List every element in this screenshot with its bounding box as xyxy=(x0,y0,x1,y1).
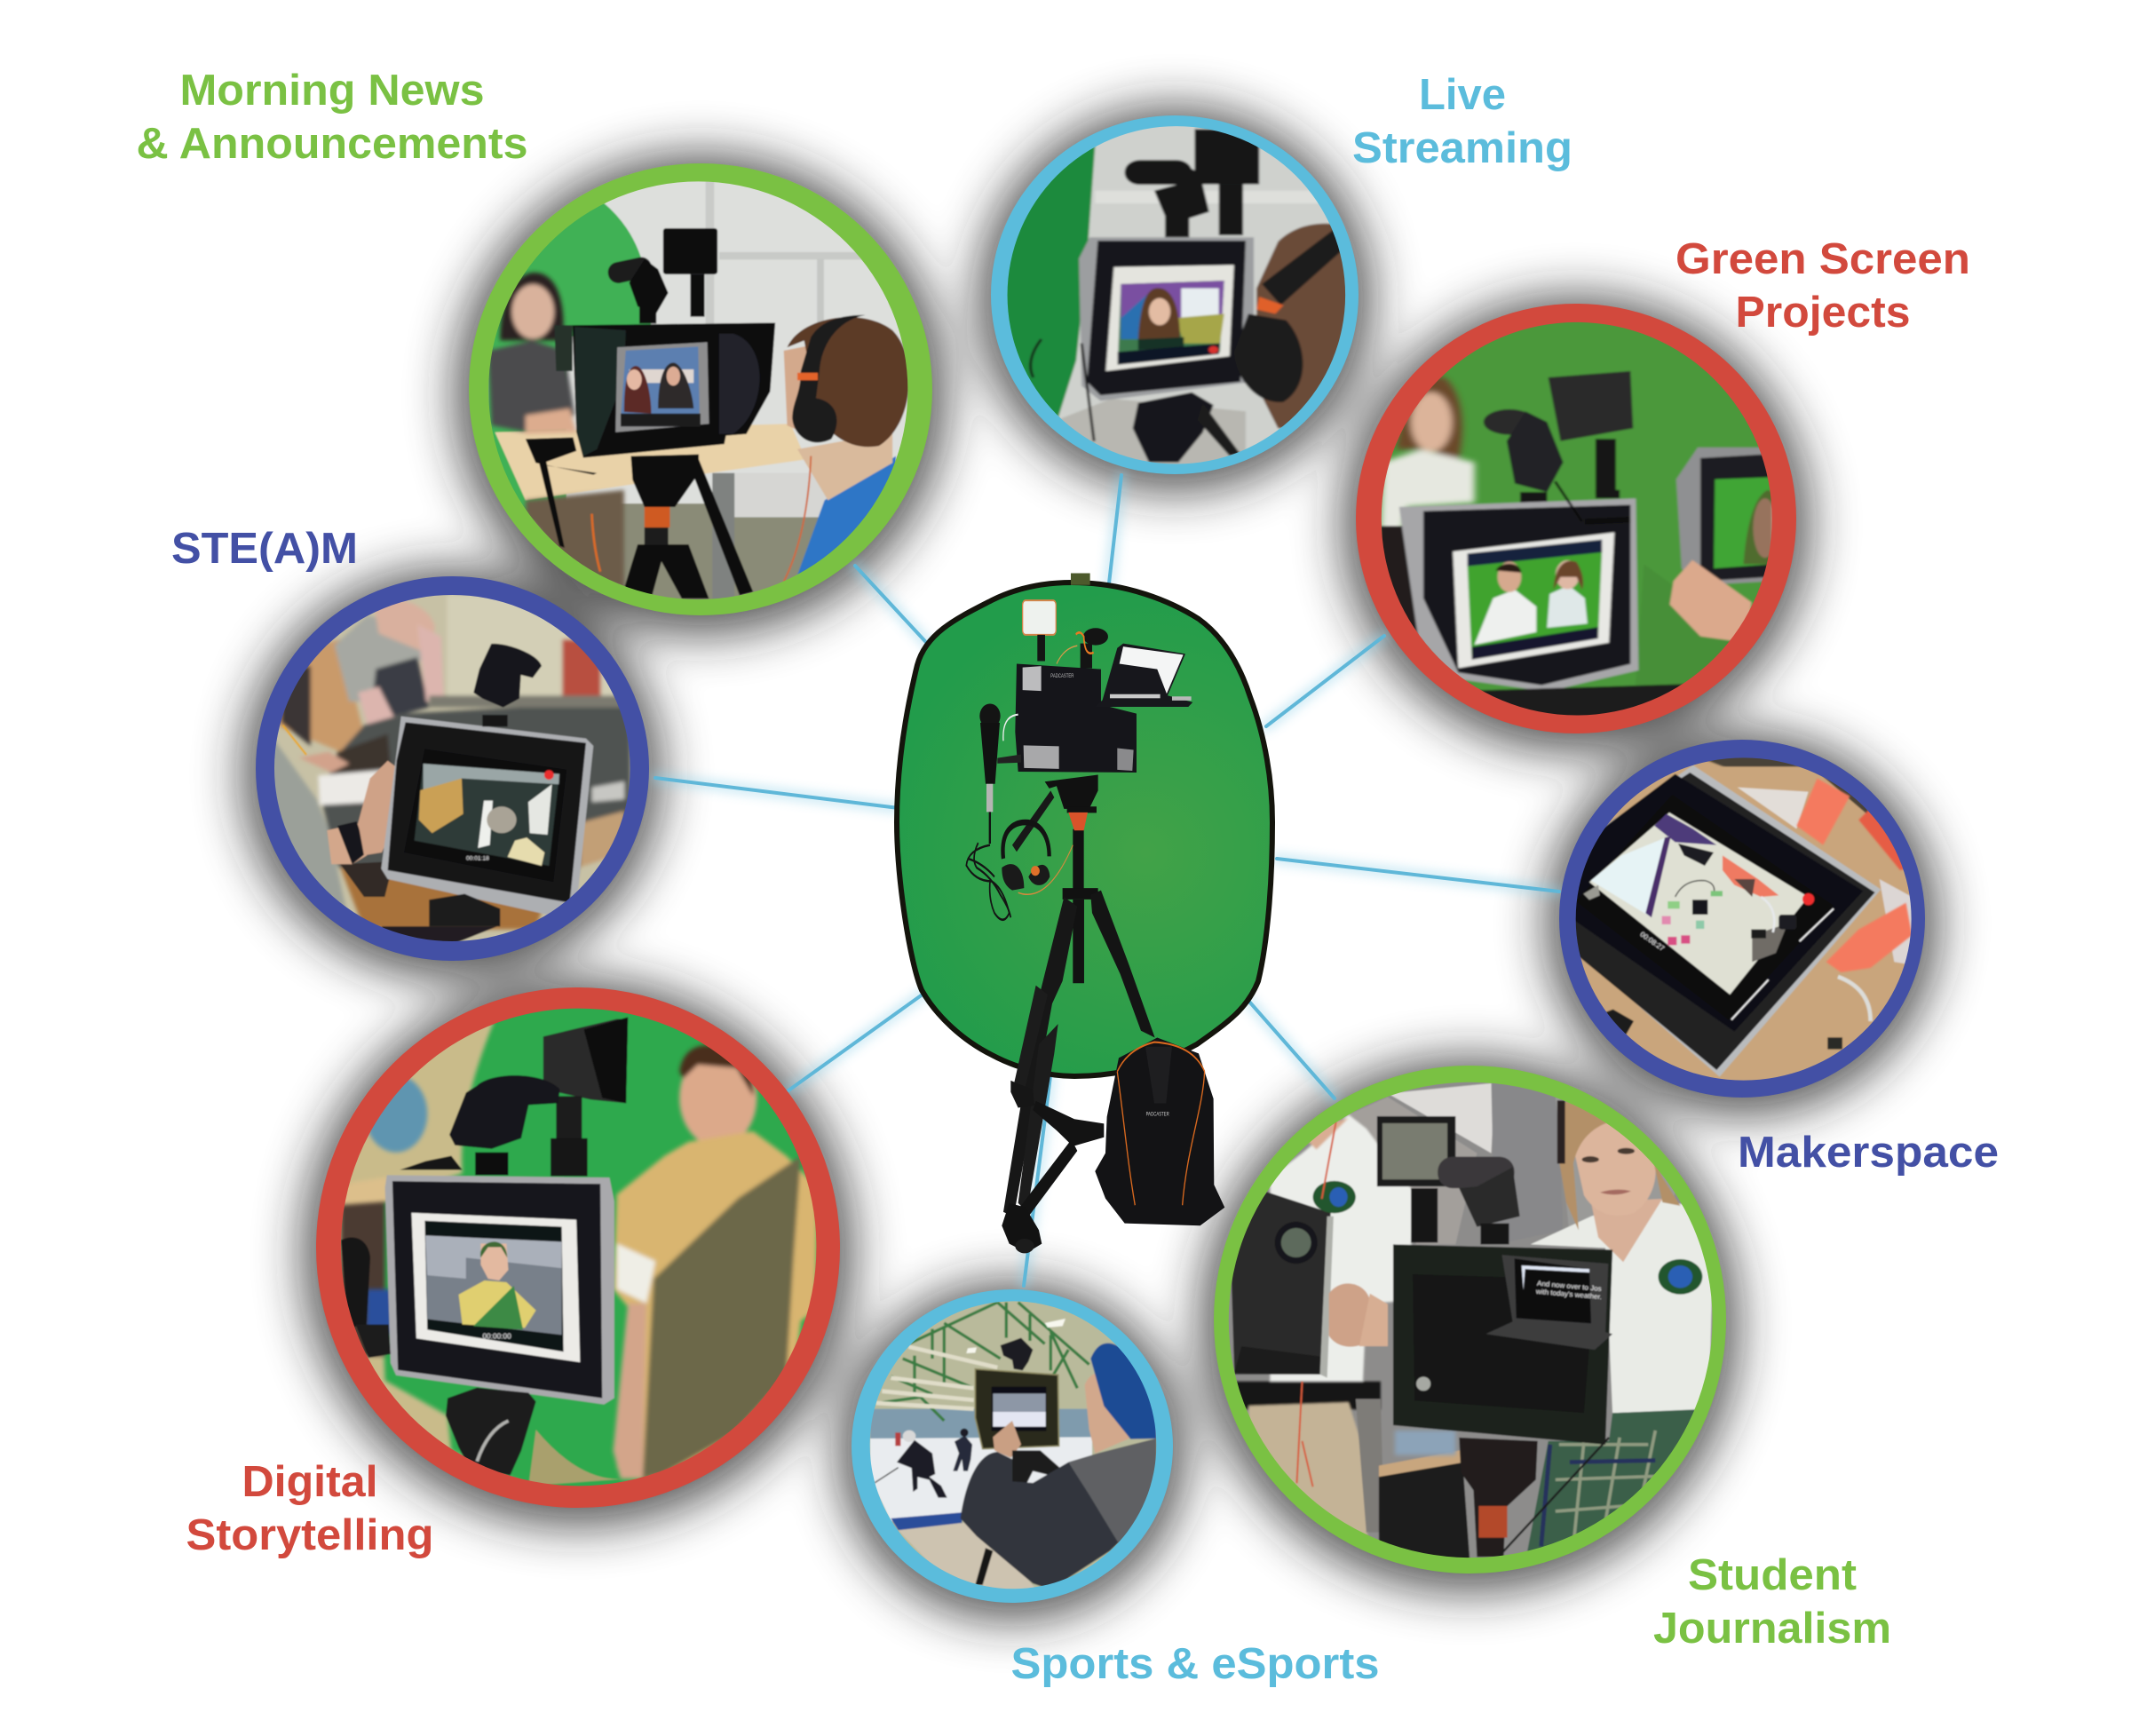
panel: steam photo circle: 00:01:18 xyxy=(466,855,489,861)
title: live streaming: Streaming xyxy=(1352,124,1573,172)
title: digital storytelling: Storytelling xyxy=(186,1511,433,1559)
title: student journalism xyxy=(1653,1551,1891,1653)
title: morning news and announcements: Morning News xyxy=(179,67,485,115)
connector lines xyxy=(655,475,1559,1286)
kit illustration: PADCASTER xyxy=(1050,673,1073,679)
panel: steam photo circle xyxy=(256,576,649,961)
title: green screen projects: Projects xyxy=(1735,289,1911,337)
kit illustration xyxy=(966,574,1224,1253)
panel: makerspace photo circle: 00:08:27 xyxy=(1639,931,1667,953)
title: digital storytelling: Digital xyxy=(242,1458,378,1506)
title: morning news and announcements: & Announcements xyxy=(137,120,527,168)
title: makerspace: Makerspace xyxy=(1738,1129,1999,1177)
title: sports and esports: Sports & eSports xyxy=(1010,1640,1380,1688)
green screen backdrop xyxy=(897,583,1272,1076)
title: digital storytelling xyxy=(186,1458,433,1559)
panel: digital storytelling photo circle xyxy=(316,987,840,1508)
panel: makerspace photo circle xyxy=(1559,740,1925,1098)
panel: live streaming photo circle xyxy=(991,115,1359,474)
title: steam: STE(A)M xyxy=(171,525,358,573)
panel: green screen projects photo circle xyxy=(1353,301,1810,747)
title: student journalism: Student xyxy=(1688,1551,1857,1599)
title: live streaming xyxy=(1352,71,1573,172)
panel: sports and esports photo circle xyxy=(852,1289,1173,1603)
title: live streaming: Live xyxy=(1419,71,1506,119)
title: green screen projects: Green Screen xyxy=(1675,235,1970,283)
title: morning news and announcements xyxy=(137,67,527,168)
title: student journalism: Journalism xyxy=(1653,1605,1891,1653)
panel: student journalism photo circle: with today's weather. xyxy=(1535,1288,1602,1301)
panel: digital storytelling photo circle: 00:00:00 xyxy=(482,1332,511,1340)
title: green screen projects xyxy=(1675,235,1970,337)
panel: central green screen with kit xyxy=(897,574,1272,1253)
panel: morning news photo circle xyxy=(469,163,932,615)
kit illustration: PADCASTER xyxy=(1146,1112,1169,1118)
panel: student journalism photo circle: And now over to Jos xyxy=(1537,1280,1602,1293)
panel: student journalism photo circle xyxy=(1214,1066,1726,1573)
